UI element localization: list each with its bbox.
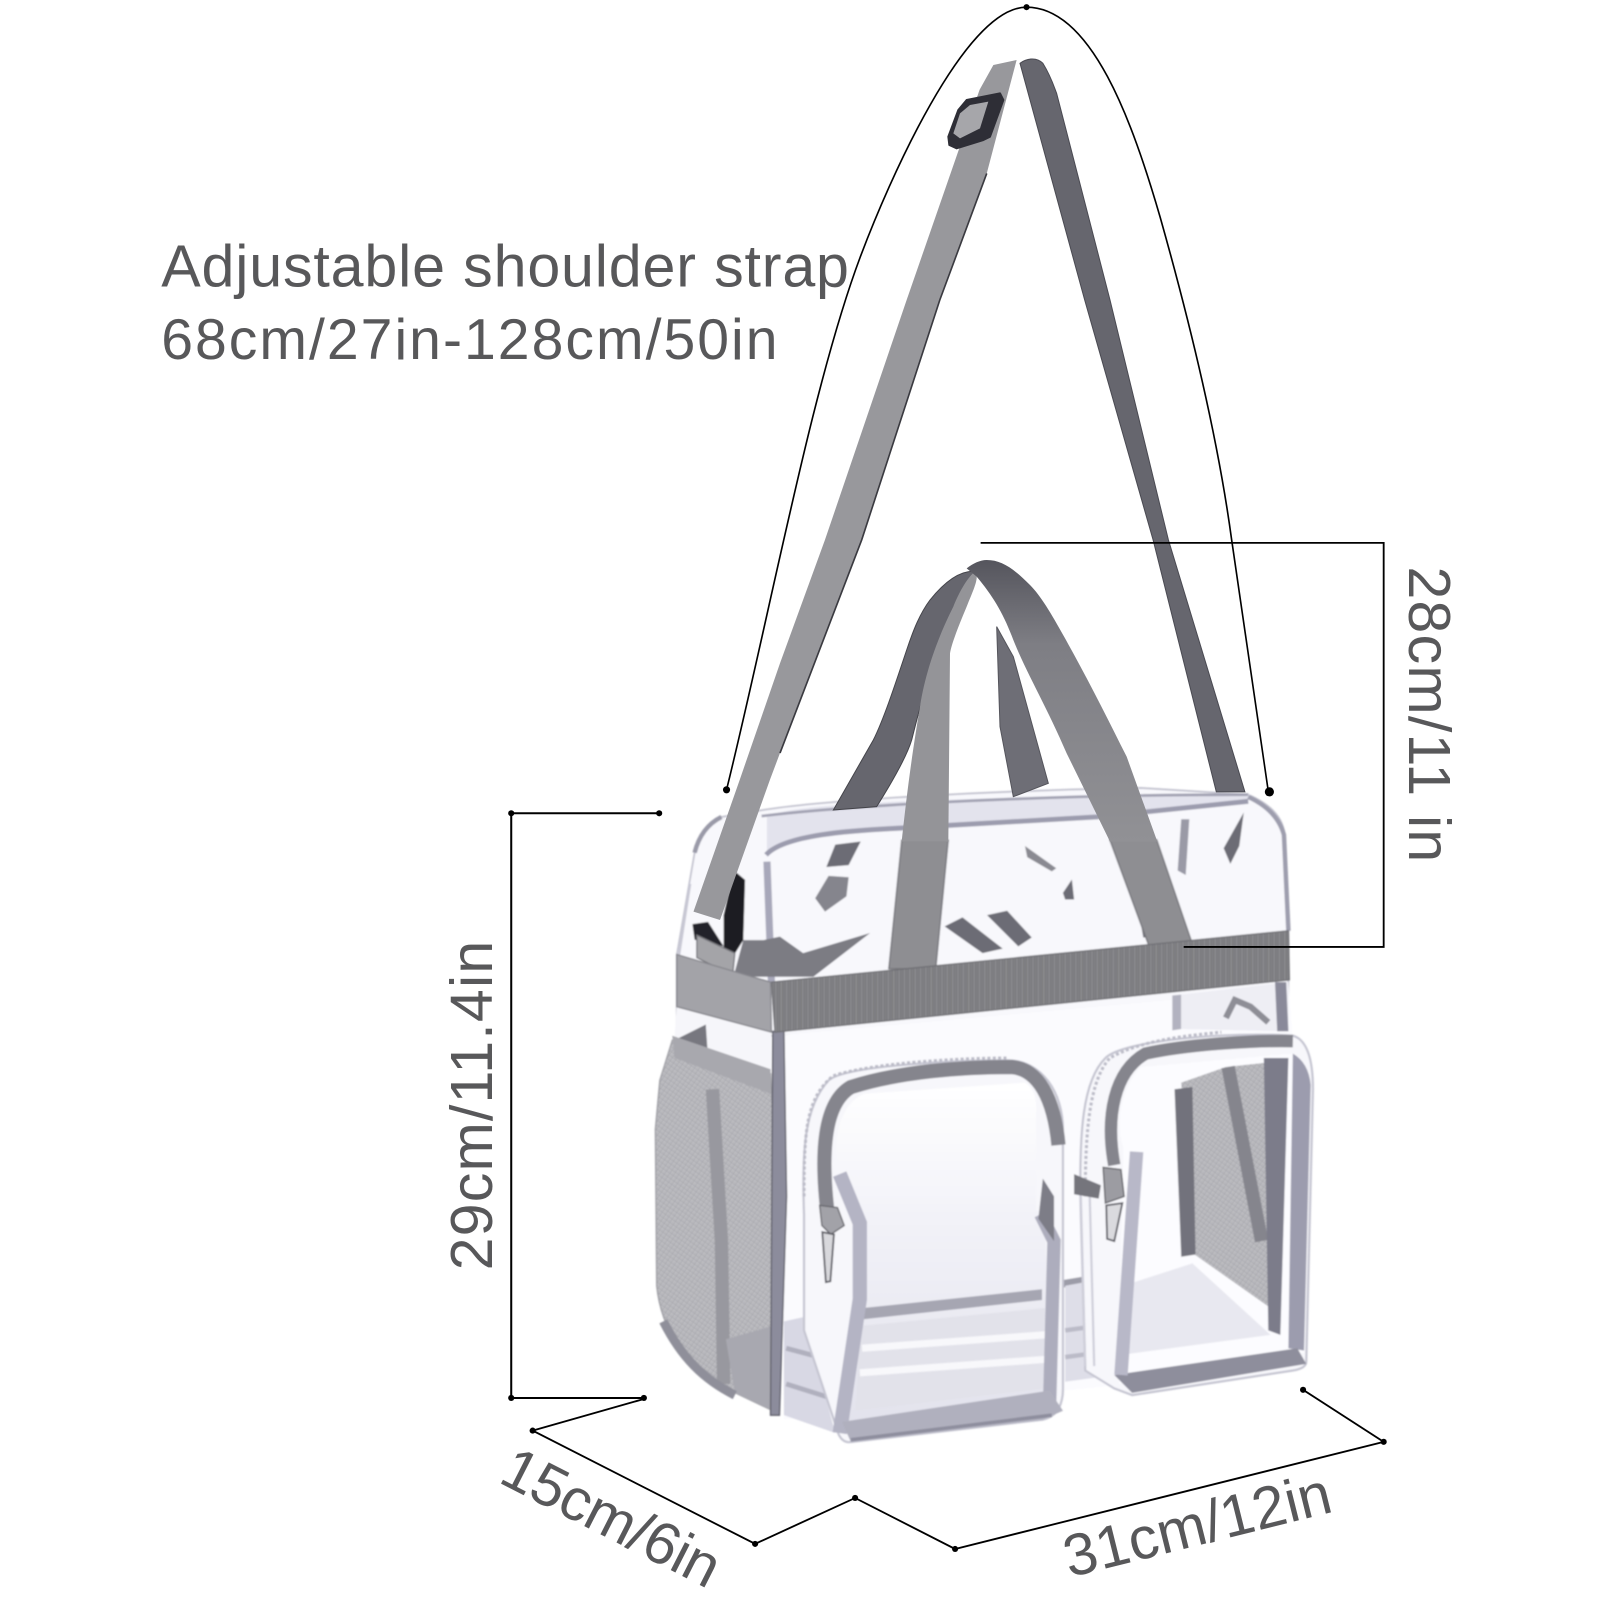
front left seam bbox=[771, 1031, 787, 1415]
dimension: depth and width brackets bbox=[530, 1387, 1387, 1552]
zipper pull bbox=[820, 1205, 844, 1282]
illustration: shoulder strap front section bbox=[693, 60, 1017, 920]
text: handle drop: 28cm/11 in bbox=[1396, 566, 1463, 862]
illustration: carry handles bbox=[833, 560, 1157, 842]
front carry handle lower parts bbox=[889, 840, 1192, 969]
text: strap length: 68cm/27in-128cm/50in bbox=[161, 308, 778, 372]
bag lower front face bbox=[777, 982, 1302, 1433]
right front pocket bbox=[1074, 1032, 1313, 1395]
dark shapes seen through the clear panel bbox=[692, 812, 1244, 977]
back left handle bbox=[833, 571, 978, 810]
zipper pull and tab bbox=[1074, 1167, 1124, 1241]
front right handle bbox=[967, 560, 1157, 842]
icon: strap adjuster buckle bbox=[948, 93, 1003, 148]
text: bag depth: 15cm/6in bbox=[491, 1434, 732, 1600]
back right handle bbox=[997, 627, 1048, 797]
horizontal webbing band bbox=[677, 931, 1289, 1032]
dimension: shoulder strap arc bbox=[723, 4, 1274, 796]
text: bag height: 29cm/11.4in bbox=[438, 941, 505, 1270]
dimension: handle drop bracket bbox=[981, 543, 1384, 947]
dimension: bag height bracket bbox=[508, 810, 662, 1401]
front left handle bbox=[902, 572, 977, 842]
left front pocket bbox=[803, 1058, 1063, 1442]
text: bag width: 31cm/12in bbox=[1056, 1459, 1338, 1590]
text: strap label: Adjustable shoulder strap bbox=[161, 233, 849, 300]
side clear area and mesh pocket bbox=[655, 1007, 777, 1411]
bag top panel bbox=[677, 788, 1288, 1036]
illustration: clear bag body bbox=[655, 788, 1313, 1442]
illustration: shoulder strap back section bbox=[1020, 59, 1245, 792]
